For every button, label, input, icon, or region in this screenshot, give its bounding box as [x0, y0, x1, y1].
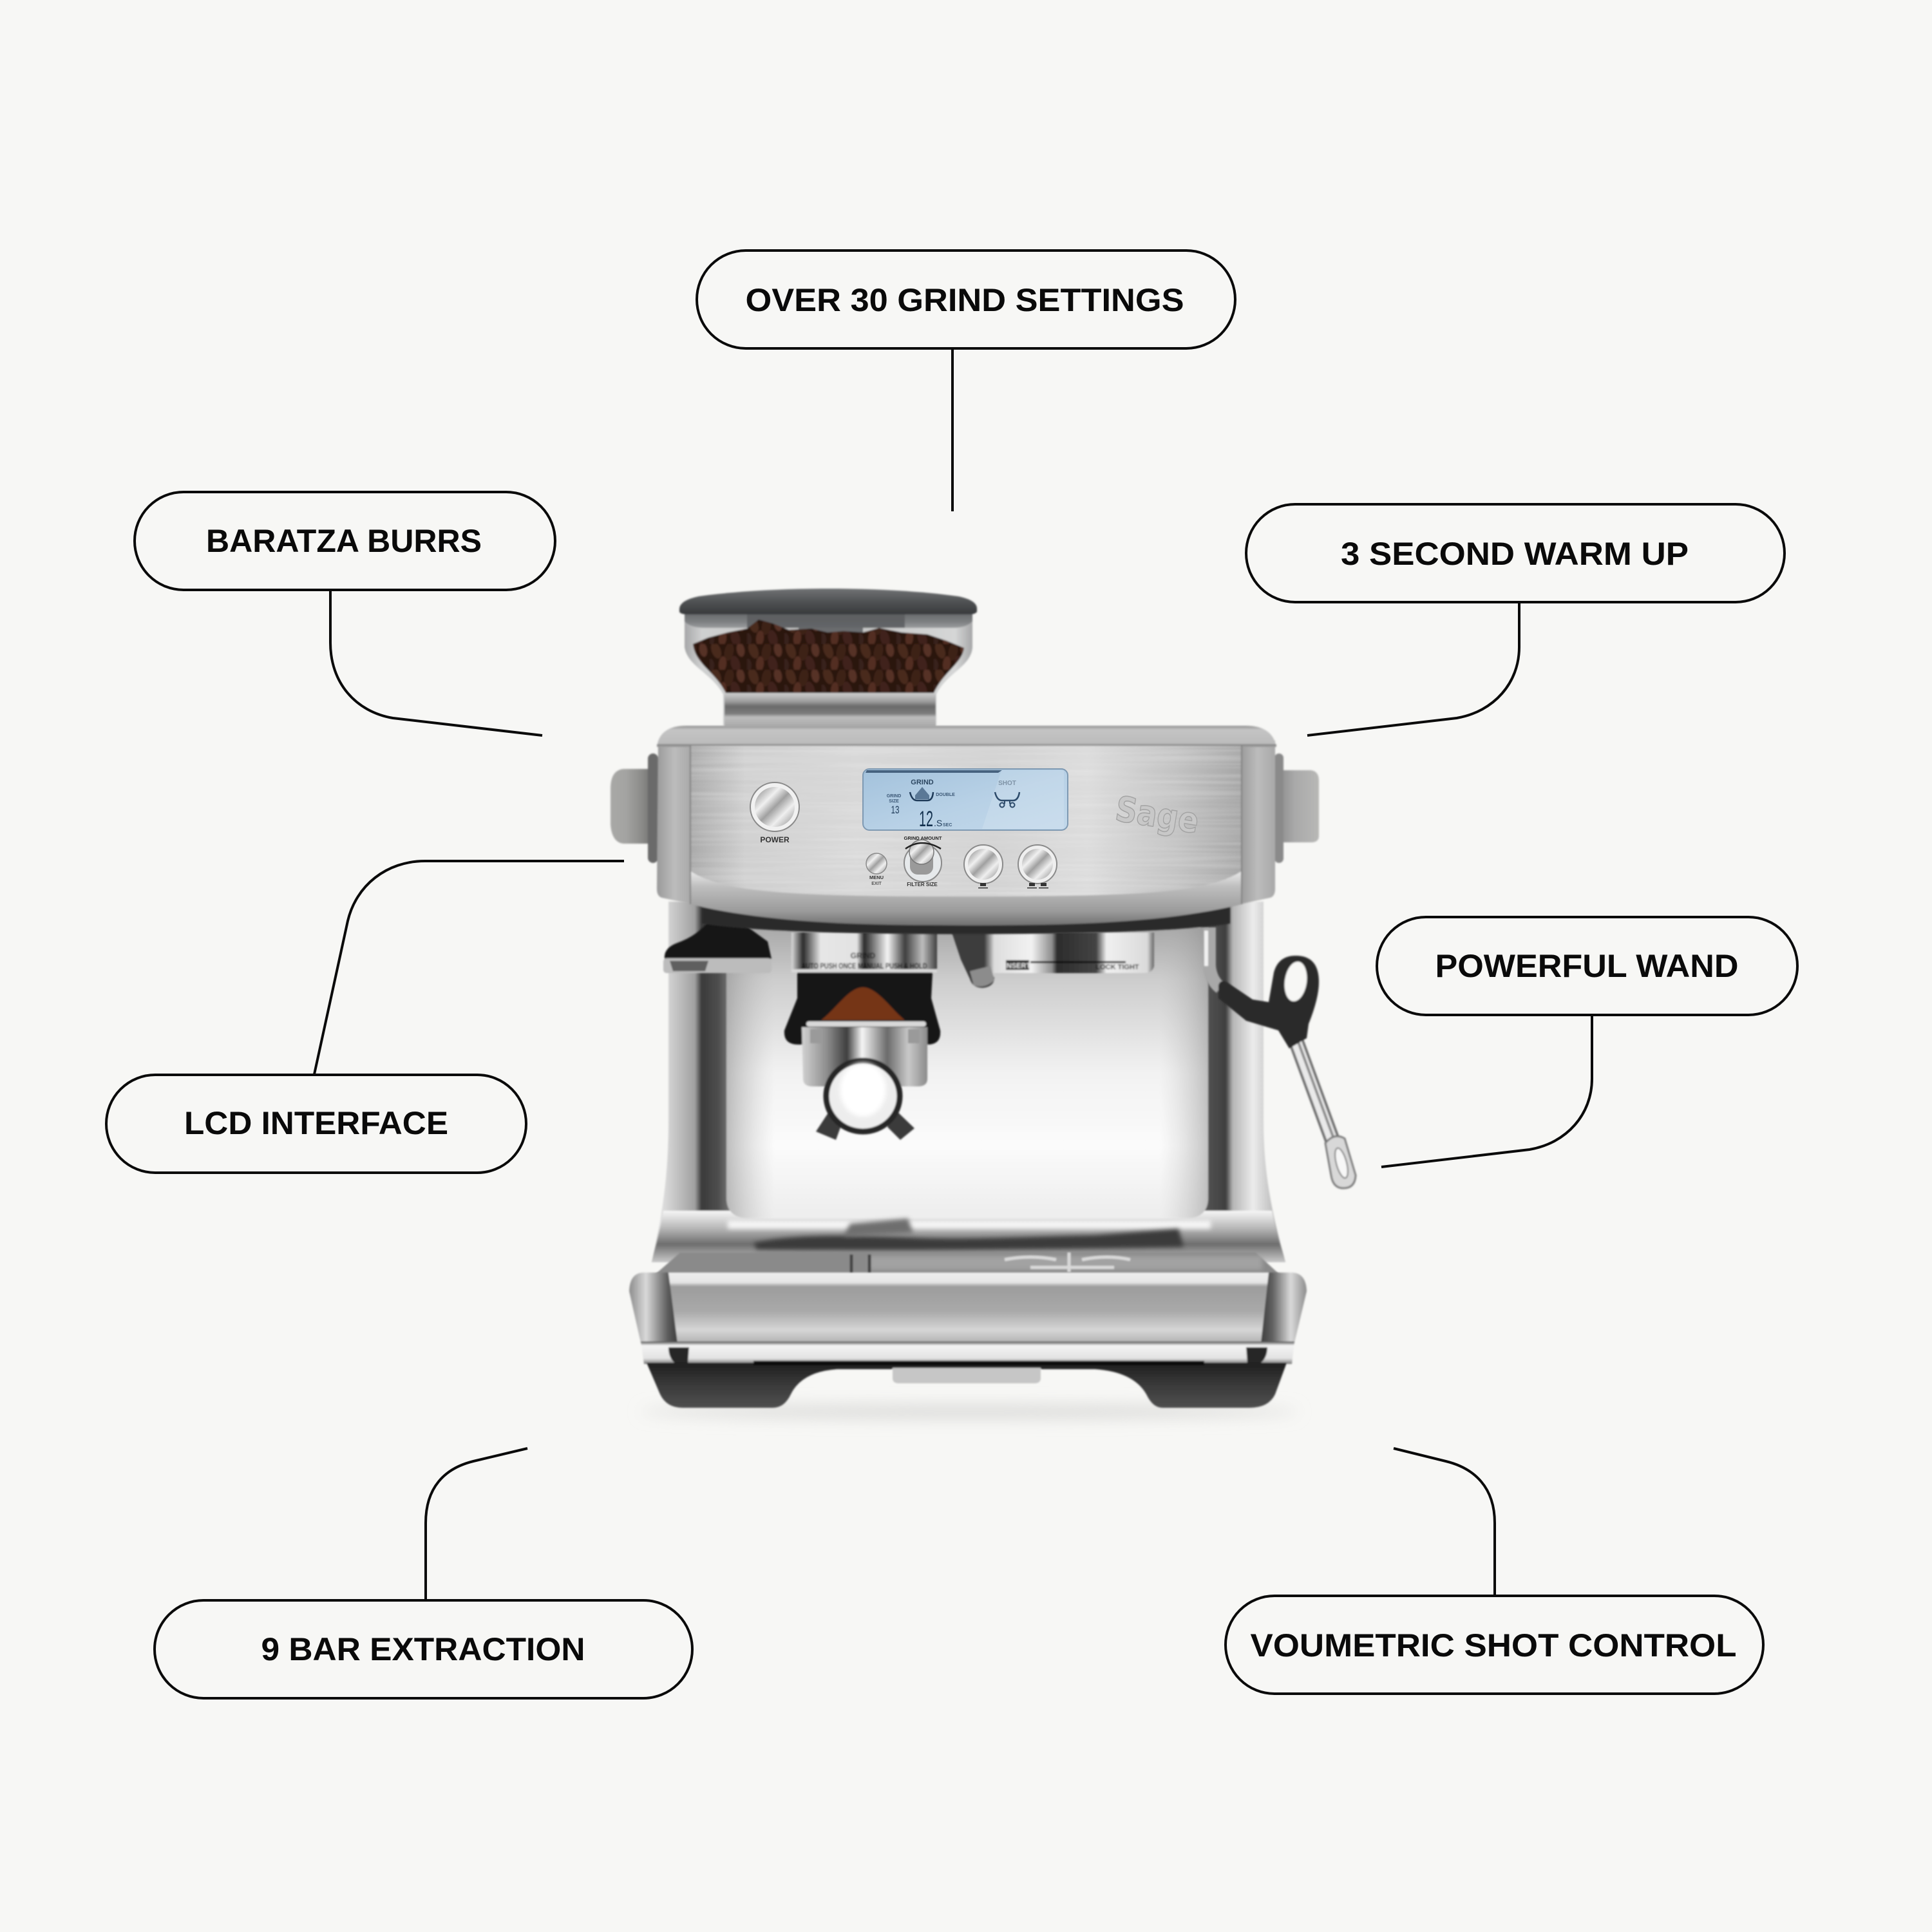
basket rim [806, 1021, 926, 1027]
connector: baratza burrs [330, 590, 542, 735]
steam wand [1206, 927, 1356, 1188]
wand tip slot [1332, 1147, 1350, 1179]
sage logo: Sage [1113, 788, 1202, 842]
lower lip [690, 871, 1242, 925]
lcd glare [982, 770, 1064, 829]
right column [1200, 902, 1285, 1262]
callout: 3 second warm up [1246, 504, 1785, 735]
grille light [869, 1256, 1262, 1270]
group head label: AUTO PUSH ONCE MANUAL PUSH & HOLD [801, 961, 927, 971]
knob left [611, 769, 654, 844]
brew area [663, 914, 1154, 1140]
grind size label: GRIND [887, 794, 901, 799]
under head shadow [702, 898, 1230, 934]
seam lines [657, 745, 1276, 904]
pill: 3 second warm up [1246, 504, 1785, 602]
grind size value: 13 [891, 804, 899, 816]
grip [1218, 956, 1319, 1048]
control buttons [866, 835, 1057, 889]
hopper tinted top [685, 609, 972, 628]
single shot button [964, 845, 1003, 884]
tray left end [629, 1273, 677, 1343]
pill: 9 bar extraction [155, 1600, 692, 1698]
dark reflection streak [753, 1229, 1184, 1250]
connector: lcd interface [314, 861, 624, 1074]
hopper lid [679, 589, 977, 614]
grind amount knob base [910, 851, 933, 875]
callout: over 30 grind settings [697, 251, 1235, 511]
grind cup icon [910, 792, 933, 800]
single shot disc [968, 849, 999, 880]
ground shadow [641, 1405, 1298, 1419]
label: baratza burrs: BARATZA BURRS [206, 523, 482, 559]
grind amount knob ring [904, 844, 942, 882]
rail end right [1246, 1347, 1267, 1364]
top band [657, 726, 1276, 747]
wand upper pipe [1209, 927, 1220, 988]
grind pile icon [915, 787, 929, 799]
drip tray grille [654, 1253, 1280, 1275]
hopper inner column [747, 612, 905, 644]
label: grind settings: OVER 30 GRIND SETTINGS [746, 282, 1184, 318]
power button [750, 782, 799, 844]
lcd panel [863, 769, 1068, 830]
under tray slot [893, 1368, 1041, 1383]
drip spout reflection [844, 1218, 913, 1236]
power label: POWER [760, 835, 790, 844]
label: powerful wand: POWERFUL WAND [1435, 948, 1739, 984]
menu button [866, 853, 887, 874]
coffee beans [693, 620, 964, 693]
pill: grind settings [697, 251, 1235, 348]
menu label: MENU [869, 875, 884, 880]
basket body [802, 1027, 927, 1086]
chute ring shade [670, 961, 708, 971]
handle ring [826, 1061, 900, 1132]
side panels [657, 741, 692, 904]
nozzle tip [970, 966, 994, 987]
reflection highlight [728, 1220, 1211, 1229]
grille lines [851, 1255, 869, 1274]
double shot disc [1022, 849, 1053, 880]
timer unit: SEC [943, 823, 952, 828]
handle shine [840, 1063, 886, 1117]
insert tag: INSERT [1005, 962, 1030, 970]
single shot icon [978, 883, 988, 889]
grind amount knob [909, 840, 934, 864]
wand tip [1325, 1136, 1356, 1188]
knob right [1278, 770, 1319, 842]
wand tube shade [1296, 1037, 1340, 1156]
spout legs [816, 1111, 914, 1140]
pill: volumetric shot control [1226, 1596, 1763, 1694]
label: volumetric shot control: VOUMETRIC SHOT CONTROL [1251, 1627, 1736, 1663]
group head band [791, 933, 937, 972]
left grinder chute [665, 914, 772, 959]
brushed texture [690, 745, 1242, 900]
shot cup icon [995, 792, 1019, 800]
group head label [801, 951, 927, 971]
filter size label: FILTER SIZE [907, 882, 938, 887]
bean hopper [679, 589, 977, 726]
grind amount label: GRIND AMOUNT [904, 835, 942, 841]
double shot icon [1027, 883, 1048, 889]
grind amount arrow arc [905, 843, 941, 849]
label: 9 bar extraction: 9 BAR EXTRACTION [261, 1631, 585, 1667]
double label: DOUBLE [936, 793, 955, 797]
tray front [668, 1273, 1269, 1343]
lcd screen [863, 769, 1068, 831]
shot dual spout icon [999, 800, 1015, 808]
timer decimal: .S [934, 818, 942, 828]
callout: lcd interface [106, 861, 624, 1173]
chute ring [663, 958, 772, 973]
hopper glass [685, 609, 972, 726]
face panel [690, 745, 1242, 896]
left column [652, 902, 735, 1262]
feet [647, 1363, 1287, 1408]
callout: 9 bar extraction [155, 1448, 692, 1698]
group head label: GRIND [851, 951, 876, 960]
right chrome band [984, 933, 1154, 973]
power disc [755, 787, 795, 827]
body frame [652, 902, 1285, 1275]
inner panel side shade [726, 927, 1208, 1218]
tray right end [1261, 1273, 1307, 1343]
pill: baratza burrs [135, 492, 555, 590]
connector: grind settings [951, 348, 954, 511]
head unit [611, 726, 1319, 934]
callout: volumetric shot control [1226, 1448, 1763, 1694]
connector: volumetric shot control [1394, 1448, 1495, 1596]
wand tube core [1294, 1037, 1338, 1156]
grind size label 2: SIZE [889, 799, 899, 804]
base flare reflection [652, 1211, 1285, 1262]
timer value: 12 [919, 807, 933, 831]
slot shadow [753, 1361, 1204, 1365]
lcd top shadow [866, 770, 1002, 773]
chrome rail [641, 1341, 1294, 1364]
knob collar right [1274, 753, 1283, 863]
connector: 9 bar extraction [426, 1448, 527, 1600]
connector: powerful wand [1381, 1016, 1592, 1167]
pill: powerful wand [1377, 917, 1797, 1015]
exit label: EXIT [871, 882, 882, 886]
double shot button [1018, 845, 1057, 884]
lock tight label: LOCK TIGHT [1095, 963, 1139, 971]
callout: powerful wand [1377, 917, 1797, 1167]
label: lcd interface: LCD INTERFACE [184, 1105, 448, 1141]
cup rest marks [1005, 1253, 1130, 1272]
portafilter cradle [784, 972, 940, 1045]
grip hole [1282, 960, 1309, 1003]
inner back panel [726, 927, 1208, 1218]
side panel right [1240, 741, 1275, 904]
knob collar left [648, 753, 658, 863]
lock tight line [1030, 961, 1126, 963]
collar [724, 693, 936, 726]
coffee grounds [821, 987, 905, 1020]
shot heading: SHOT [998, 780, 1016, 787]
band lower lip [791, 969, 937, 972]
label: 3 second warm up: 3 SECOND WARM UP [1341, 536, 1689, 572]
basket lugs [810, 1029, 920, 1043]
centre nozzle [952, 933, 994, 988]
wand tube [1294, 1037, 1338, 1156]
pill: lcd interface [106, 1075, 526, 1173]
espresso machine illustration [611, 589, 1356, 1419]
rail end left [668, 1347, 689, 1364]
callout: baratza burrs [135, 492, 555, 735]
grind heading: GRIND [911, 779, 934, 786]
connector: 3 second warm up [1307, 602, 1519, 735]
drip tray [629, 1273, 1307, 1408]
wand pipe highlight [1204, 931, 1208, 966]
power ring [750, 782, 799, 831]
